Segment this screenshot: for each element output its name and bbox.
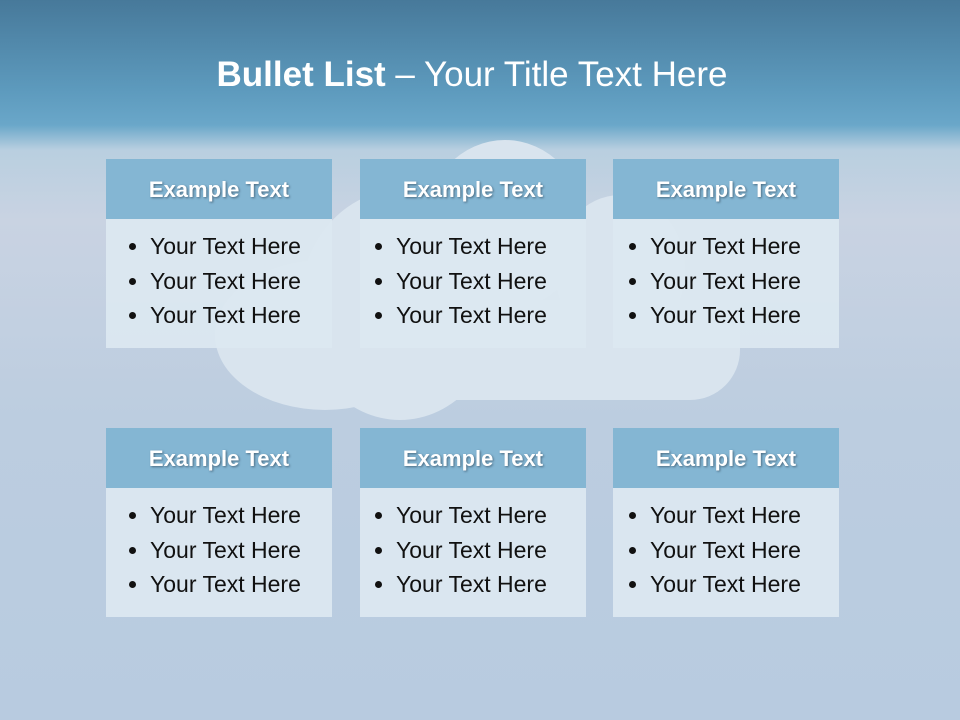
panel: bottom left (106, 428, 332, 617)
panel: top right: Your Text Here (650, 302, 801, 328)
panel: top right: Example Text (656, 177, 796, 202)
panel: bottom middle: Your Text Here (396, 536, 547, 562)
panel: bottom right: Your Text Here (650, 502, 801, 528)
panel: bottom right (613, 428, 839, 617)
panel: top right: Your Text Here (650, 233, 801, 259)
panel: bottom left: Your Text Here (150, 571, 301, 597)
panel: bottom right: Example Text (656, 446, 796, 471)
panel: top left: Your Text Here (150, 268, 301, 294)
panel: bottom right: Your Text Here (650, 571, 801, 597)
panel: bottom middle: Your Text Here (396, 502, 547, 528)
panel: bottom left: Example Text (149, 446, 289, 471)
panel: top left: Your Text Here (150, 302, 301, 328)
panel: top middle: Your Text Here (396, 302, 547, 328)
panel: bottom middle: Example Text (403, 446, 543, 471)
panel: top middle: Your Text Here (396, 233, 547, 259)
panel: bottom left: Your Text Here (150, 536, 301, 562)
panel: bottom middle: Your Text Here (396, 571, 547, 597)
panel: top middle (360, 159, 586, 328)
panel: top middle: Your Text Here (396, 268, 547, 294)
panel: bottom left: Your Text Here (150, 502, 301, 528)
panel: top left (106, 159, 332, 348)
panel: bottom middle (360, 428, 586, 617)
panel: top middle: Example Text (403, 177, 543, 202)
panel: top left: Example Text (149, 177, 289, 202)
panel: bottom right: Your Text Here (650, 536, 801, 562)
panel: top right (613, 159, 839, 348)
panel: top right: Your Text Here (650, 268, 801, 294)
title: Bullet List – Your Title Text Here (217, 55, 727, 94)
panel: top left: Your Text Here (150, 233, 301, 259)
